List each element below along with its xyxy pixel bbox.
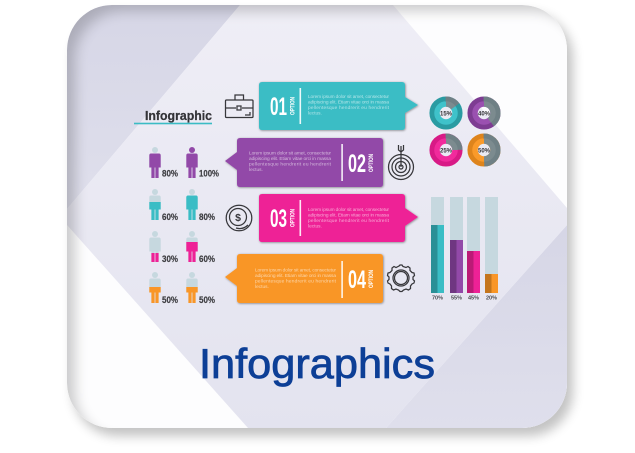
donut: 15% teal: 15% xyxy=(440,111,453,117)
figure: orange 50% xyxy=(149,272,161,303)
icon: dollar coin: $ xyxy=(235,212,241,224)
label: 100%: 100% xyxy=(199,168,219,180)
bar chart xyxy=(431,197,498,302)
panel: option 01: lectus. xyxy=(308,110,322,116)
panel: option 02: pellentesque hendrerit eu hendrerit xyxy=(249,162,332,168)
panel: option 03: adipiscing elit. Etiam vitae orci in massa xyxy=(308,212,389,218)
icon: gear xyxy=(388,265,414,292)
panel: option 02 xyxy=(225,138,383,187)
label: 50%: 50% xyxy=(162,295,178,306)
panel: option 04 xyxy=(225,254,383,303)
label: 50%: 50% xyxy=(199,295,215,306)
bar: 70% teal: 70% xyxy=(432,296,443,302)
figure: pink 60% xyxy=(186,231,198,262)
donut: 50% orange: 50% xyxy=(478,148,491,154)
label: 30%: 30% xyxy=(162,254,178,265)
people chart: row 3 xyxy=(149,231,215,265)
panel: option 01 xyxy=(259,82,418,130)
donut: 25% pink: 25% xyxy=(440,148,453,154)
panel: option 04: OPTION xyxy=(369,270,375,288)
people chart: row 2 xyxy=(149,189,215,223)
icon: briefcase xyxy=(226,95,253,118)
label: 80%: 80% xyxy=(199,212,215,223)
panel: option 02: Lorem ipsum dolor sit amet, consectetur xyxy=(249,150,331,156)
panel: option 04: adipiscing elit. Etiam vitae orci in massa xyxy=(255,273,336,279)
panel: option 02: lectus. xyxy=(249,167,263,173)
label: 80%: 80% xyxy=(162,168,178,180)
bar: 20% orange: 20% xyxy=(486,296,497,302)
panel: option 01: Lorem ipsum dolor sit amet, consectetur xyxy=(308,94,389,100)
figure: pink 30% xyxy=(149,231,161,262)
panel: rounded card background xyxy=(67,5,567,428)
panel: option 02: adipiscing elit. Etiam vitae orci in massa xyxy=(249,156,331,162)
panel: option 04: Lorem ipsum dolor sit amet, consectetur xyxy=(255,268,336,274)
panel: option 01: adipiscing elit. Etiam vitae orci in massa xyxy=(308,100,389,106)
title: Infographics: Infographics xyxy=(199,340,435,387)
icon: target with arrow xyxy=(388,145,414,180)
panel: option 03: OPTION xyxy=(290,209,296,227)
bar: 55% purple: 55% xyxy=(451,296,462,302)
panel: option 03 xyxy=(259,194,418,242)
panel: option 01: 01 xyxy=(270,93,287,121)
panel: option 03: lectus. xyxy=(308,224,322,230)
people chart: row 4 xyxy=(149,272,215,306)
panel: option 03: 03 xyxy=(270,205,287,233)
panel: option 02: OPTION xyxy=(369,154,375,172)
figure: teal 60% xyxy=(149,189,161,220)
label: 60%: 60% xyxy=(199,254,215,265)
figure: purple 80% xyxy=(149,147,161,178)
figure: orange 50% xyxy=(186,272,198,303)
panel: option 03: pellentesque hendrerit eu hendrerit xyxy=(308,218,390,224)
icon: dollar coin xyxy=(226,205,252,231)
panel: option 01: pellentesque hendrerit eu hendrerit xyxy=(308,105,390,111)
panel: option 02: 02 xyxy=(348,150,366,178)
donut: 40% purple: 40% xyxy=(478,111,491,117)
donut charts xyxy=(432,99,498,164)
panel: option 03: Lorem ipsum dolor sit amet, consectetur xyxy=(308,207,389,213)
bar: 45% pink: 45% xyxy=(468,296,479,302)
people chart: row 1 xyxy=(149,147,219,180)
panel: option 04: lectus. xyxy=(255,284,269,290)
panel: option 04: pellentesque hendrerit eu hendrerit xyxy=(255,278,337,284)
panel: option 04: 04 xyxy=(348,266,366,294)
label: 60%: 60% xyxy=(162,212,178,223)
panel: option 01: OPTION xyxy=(290,97,296,115)
heading: Infographic: Infographic xyxy=(145,108,212,123)
figure: teal 80% xyxy=(186,189,198,220)
figure: purple 100% xyxy=(186,147,198,178)
